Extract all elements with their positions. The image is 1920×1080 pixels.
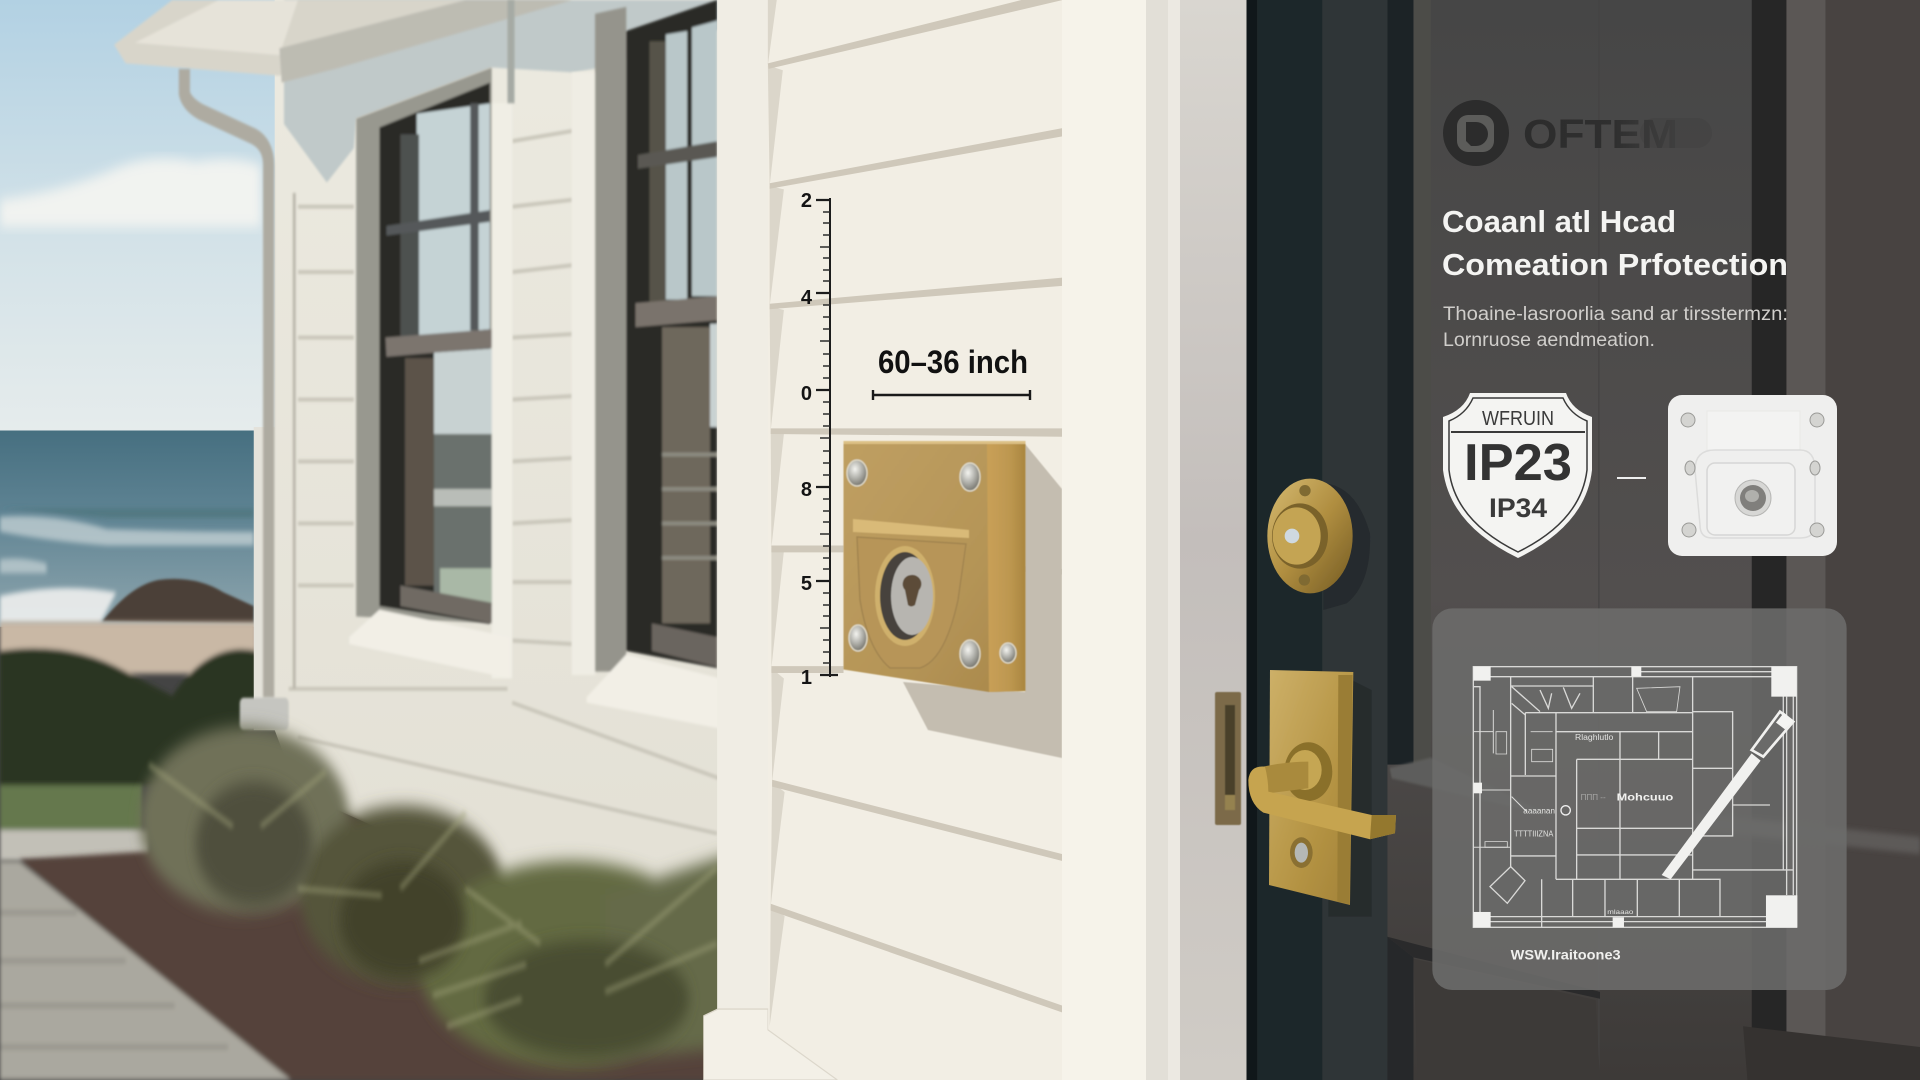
ruler scale: 4 xyxy=(801,287,813,309)
window: right xyxy=(572,0,721,729)
logo: OFTEM xyxy=(1523,111,1678,157)
plan labels: ΠΠΠ -- xyxy=(1581,792,1606,802)
shield badge: IP23 xyxy=(1464,434,1572,492)
heading: Comeation Prfotection xyxy=(1442,247,1788,282)
house wall with siding xyxy=(254,0,726,916)
dimension label xyxy=(873,344,1030,400)
plan labels: Mohcuuo xyxy=(1617,793,1673,804)
ruler scale: 0 xyxy=(801,383,812,405)
left scene: background view and house xyxy=(0,0,730,1080)
heading xyxy=(1442,204,1788,282)
background: sea, waves and rock xyxy=(0,431,256,627)
description text xyxy=(1443,304,1788,351)
base trim xyxy=(704,1009,837,1080)
logo xyxy=(1443,100,1712,166)
downspout gutter xyxy=(184,69,289,730)
ruler scale: 8 xyxy=(801,479,812,501)
ruler scale: 5 xyxy=(801,573,812,595)
centre wall: trim and siding xyxy=(704,0,1063,1080)
plan corner handles xyxy=(1473,667,1797,927)
website caption: WSW.Iraitoone3 xyxy=(1511,946,1621,962)
background: sky with cloud xyxy=(0,0,289,434)
ruler scale: 1 xyxy=(801,667,812,689)
plan labels xyxy=(1514,733,1673,916)
heading: Coaanl atl Hcad xyxy=(1442,204,1676,239)
window: left xyxy=(349,0,514,678)
connector dash xyxy=(1617,477,1646,479)
dark door xyxy=(1247,0,1920,1080)
background: sand, hedge, grass xyxy=(0,622,256,861)
ruler scale xyxy=(801,190,838,689)
description text: Thoaine-lasroorlia sand ar tirsstermzn: xyxy=(1443,304,1788,325)
siding boards xyxy=(768,0,1063,1080)
corner trim board xyxy=(717,0,769,1080)
door jamb trim xyxy=(1062,0,1247,1080)
white lock product icon xyxy=(1668,395,1837,556)
drafting pencil xyxy=(1662,712,1793,879)
shield badge: IP34 xyxy=(1489,493,1547,523)
shield badge xyxy=(1443,393,1592,558)
brass deadbolt xyxy=(1267,479,1370,610)
strike plate on jamb xyxy=(1215,692,1241,825)
foreground shrubs xyxy=(140,727,730,1068)
roof eave xyxy=(114,0,573,83)
strike plate cast shadow xyxy=(903,444,1062,758)
brass lock plate xyxy=(844,441,1026,692)
background: mulch bed and paving path xyxy=(0,792,730,1080)
plan labels: Rlaghlutlo xyxy=(1575,733,1614,742)
floor plan panel xyxy=(1432,608,1847,990)
dimension label: 60–36 inch xyxy=(878,344,1028,380)
shield badge: WFRUIN xyxy=(1482,408,1554,430)
floor plan drawing xyxy=(1473,667,1797,927)
plan labels: TTTTIIIZNA xyxy=(1514,830,1554,839)
plan labels: aaaanan xyxy=(1523,806,1555,815)
description text: Lornruose aendmeation. xyxy=(1443,330,1655,351)
plan labels: mlaaao xyxy=(1607,909,1634,916)
brass lever handle xyxy=(1248,670,1396,917)
ruler scale: 2 xyxy=(801,190,812,212)
